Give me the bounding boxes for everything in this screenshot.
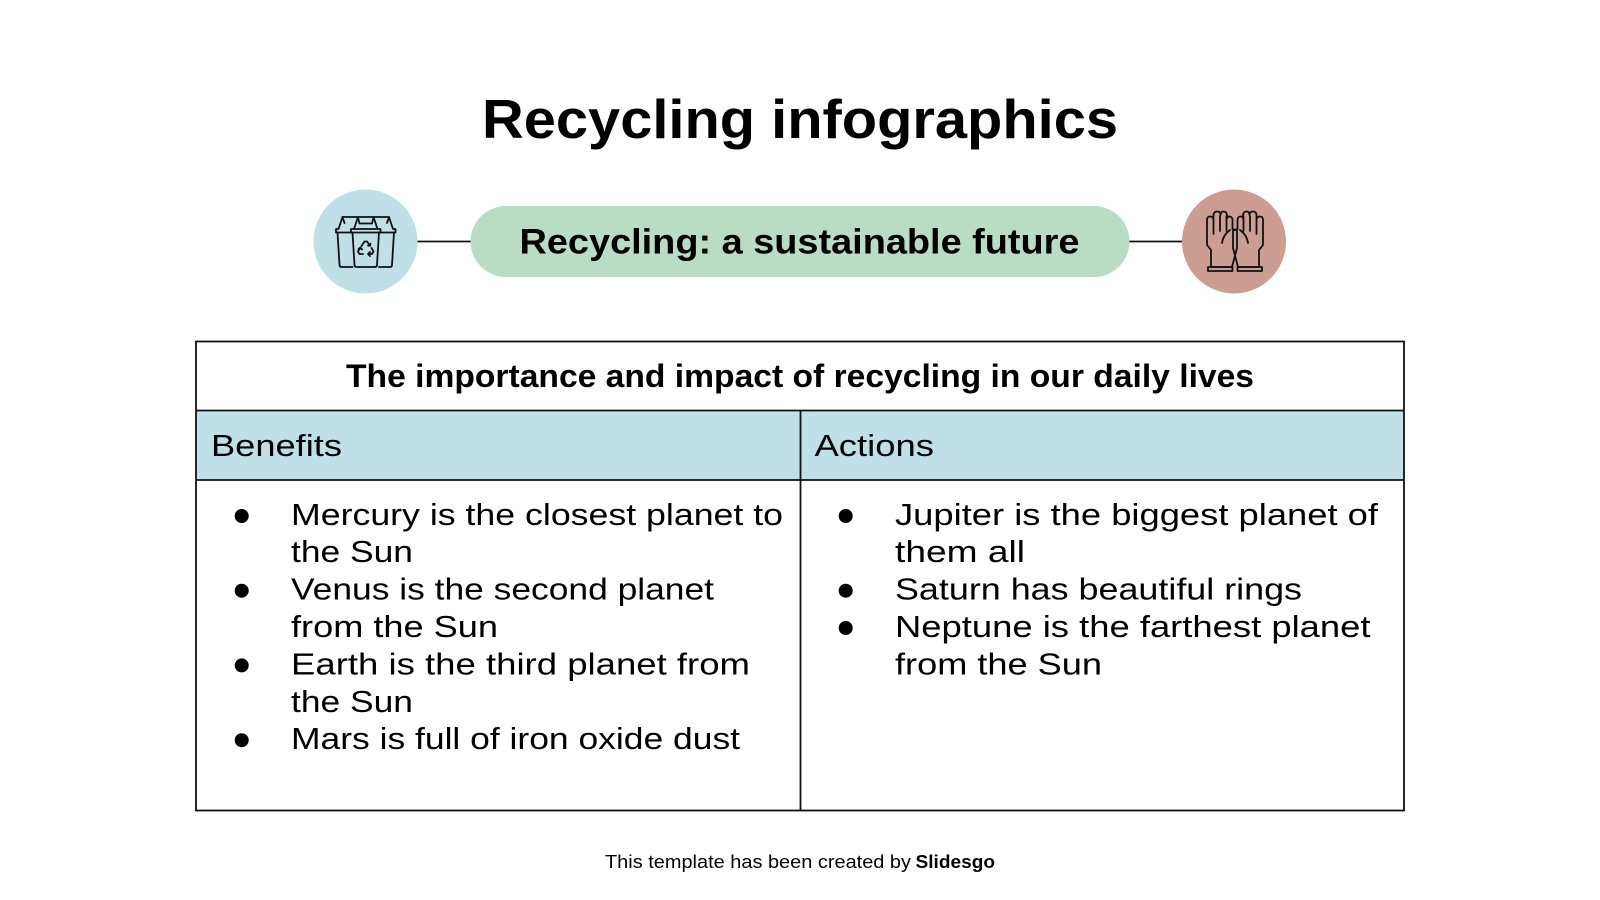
actions list: from the Sun (895, 646, 1102, 681)
actions list: Saturn has beautiful rings (895, 572, 1302, 607)
benefits list: Mercury is the closest planet to (291, 497, 783, 532)
benefits list (235, 497, 783, 756)
benefits list: from the Sun (291, 609, 498, 644)
header row: icons and subtitle (314, 190, 1286, 294)
actions list: Neptune is the farthest planet (895, 609, 1371, 644)
column heading: benefits: Benefits (211, 428, 342, 463)
benefits list: Mars is full of iron oxide dust (291, 721, 740, 756)
table heading: The importance and impact of recycling in our daily lives (346, 358, 1254, 394)
benefits list: Earth is the third planet from (291, 646, 750, 681)
footer credit: This template has been created by (605, 852, 911, 872)
actions list: Jupiter is the biggest planet of (895, 497, 1378, 532)
benefits list: the Sun (291, 684, 413, 719)
benefits and actions header band (196, 411, 1404, 480)
table (196, 342, 1404, 810)
icon: gloves (1182, 190, 1286, 294)
actions list (839, 497, 1378, 681)
title: Recycling infographics (482, 88, 1118, 150)
column heading: actions: Actions (814, 428, 934, 463)
benefits list: Venus is the second planet (291, 572, 714, 607)
icon: recycling bins (314, 190, 418, 294)
benefits list: the Sun (291, 534, 413, 569)
subtitle pill: Recycling: a sustainable future (520, 222, 1080, 262)
subtitle pill (470, 206, 1130, 277)
footer credit: Slidesgo (916, 852, 995, 872)
actions list: them all (895, 534, 1025, 569)
